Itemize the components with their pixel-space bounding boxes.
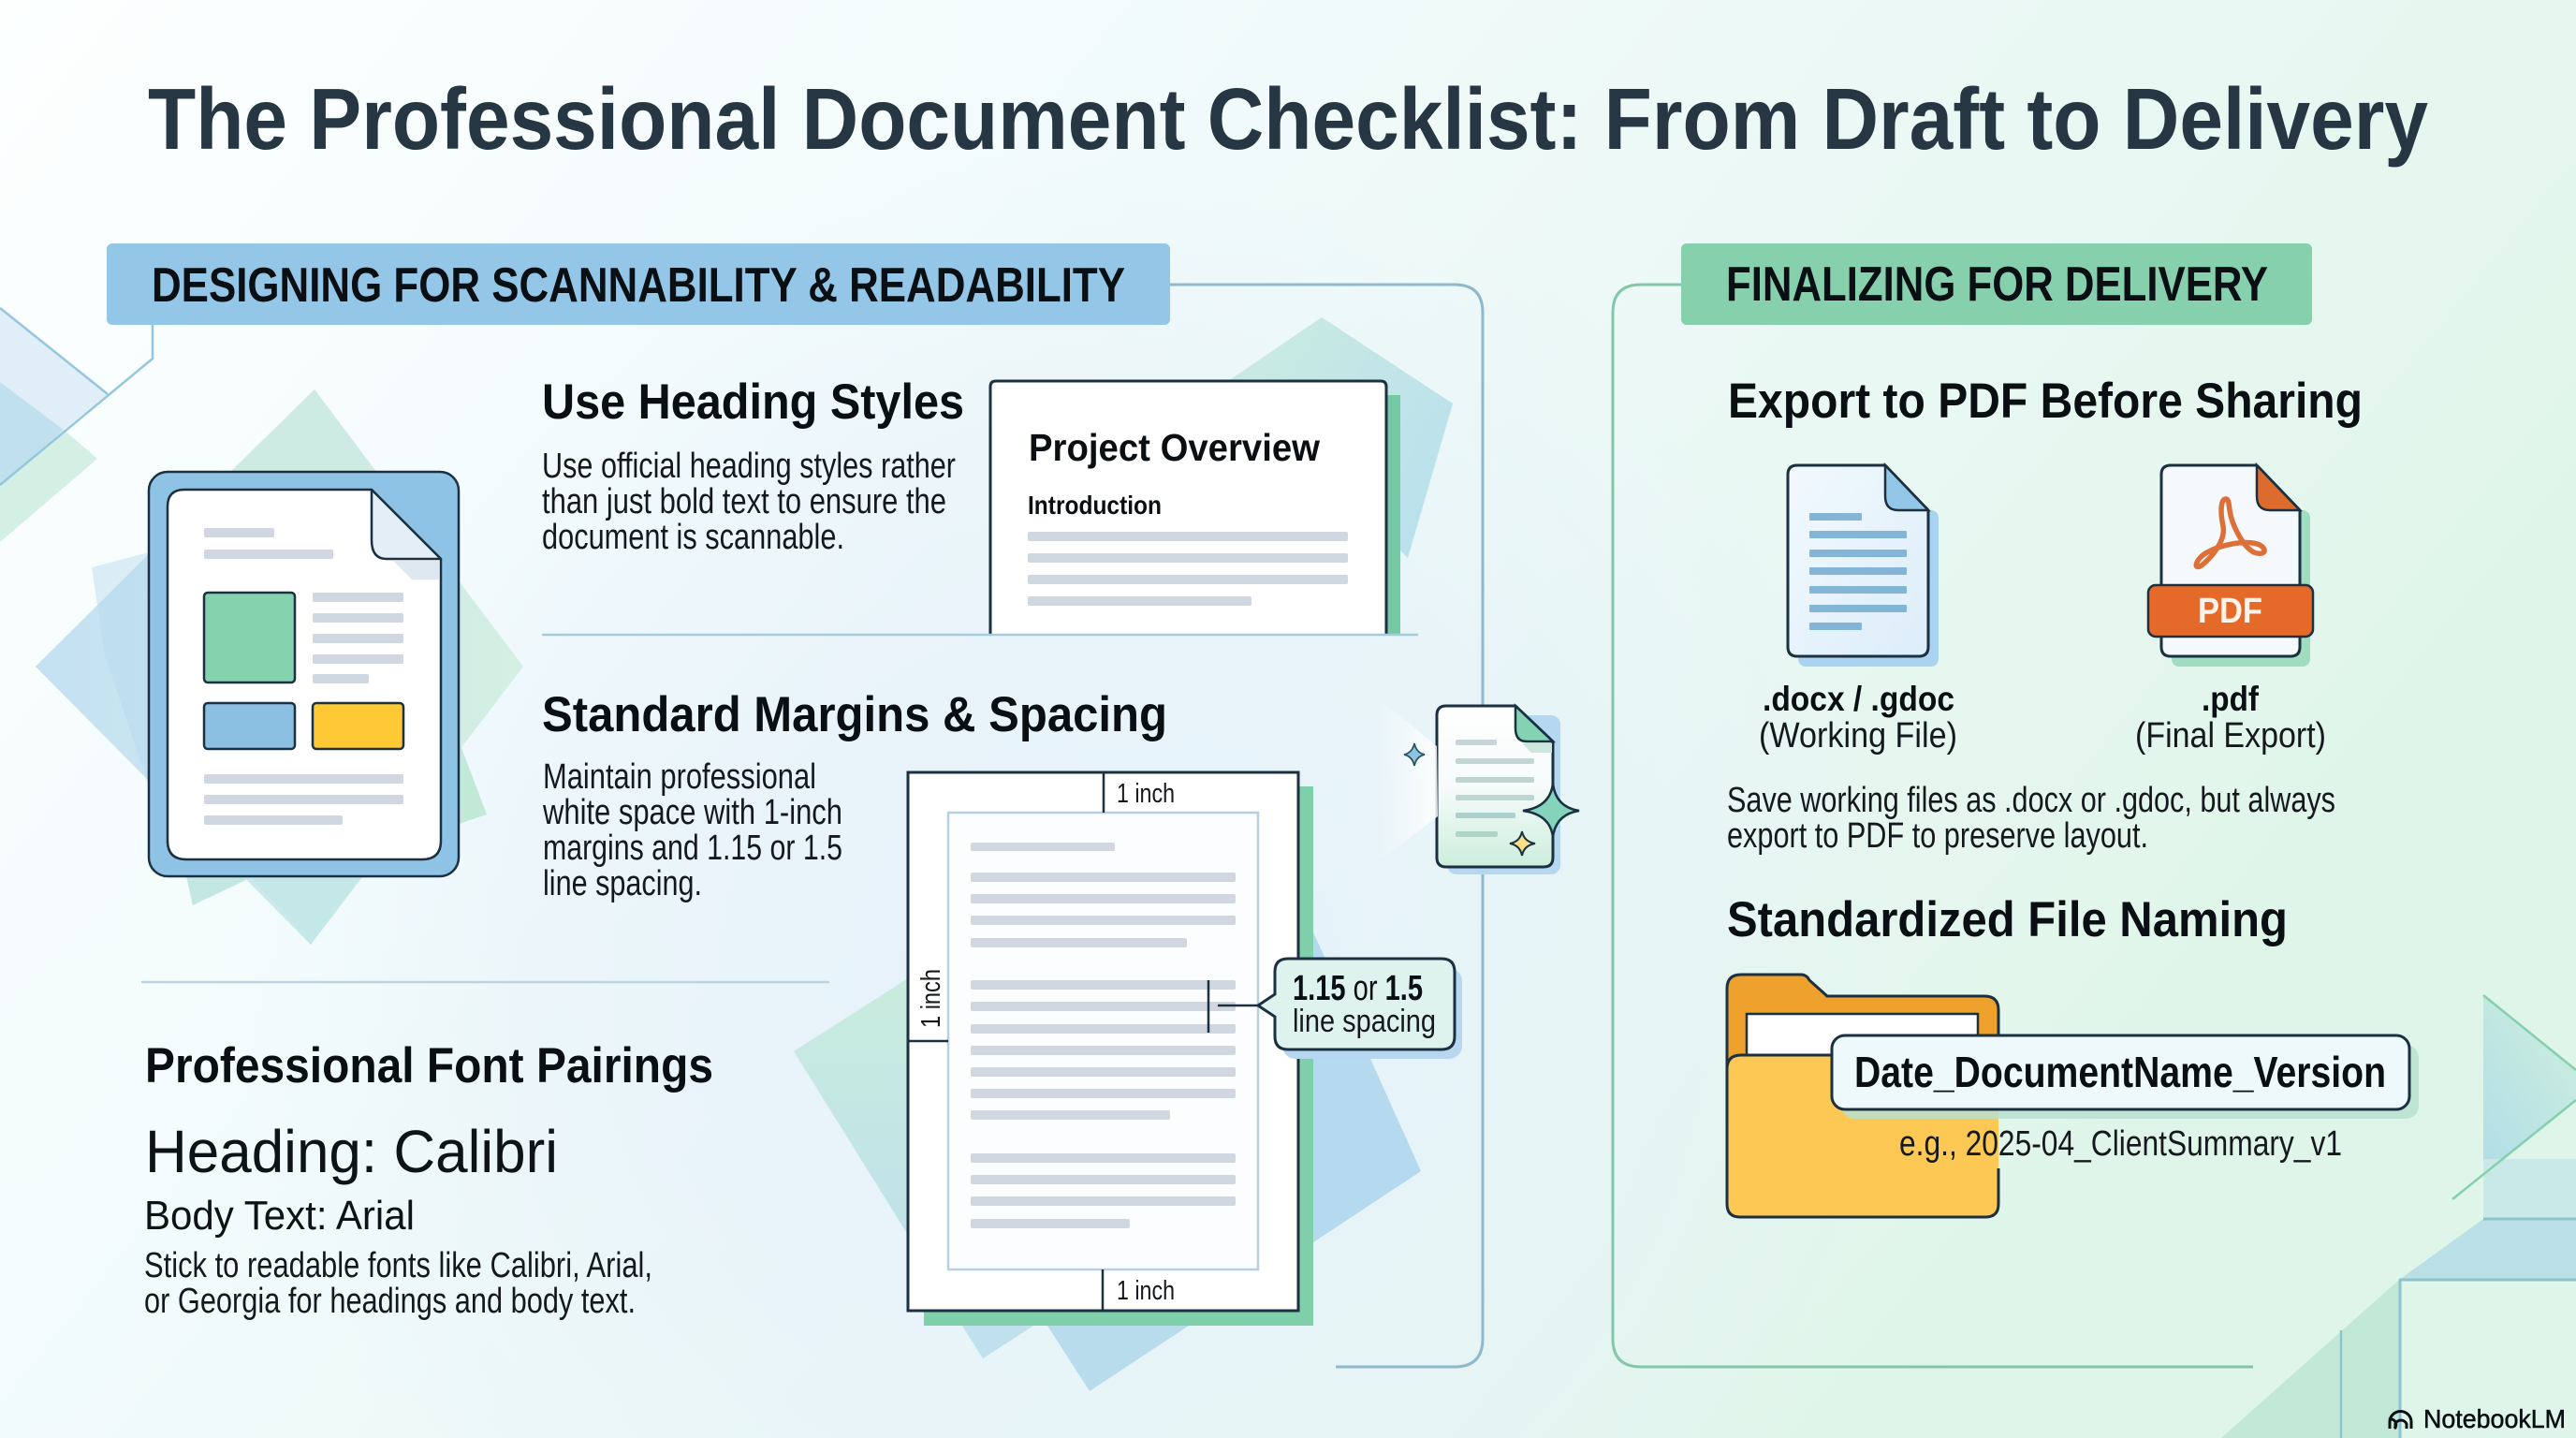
sample: heading font: Heading: Calibri	[145, 1118, 558, 1185]
label: final export	[2135, 680, 2326, 756]
text: export description	[1727, 781, 2335, 856]
illustration: project overview page: Project Overview	[1029, 426, 1320, 469]
text: export description: export to PDF to preserve layout.	[1727, 816, 2148, 856]
header banner left	[107, 243, 1170, 325]
text: margins description	[542, 757, 842, 903]
header banner left: DESIGNING FOR SCANNABILITY & READABILITY	[152, 258, 1125, 313]
icon: folder	[1727, 975, 1998, 1217]
heading: standard margins: Standard Margins & Spacing	[542, 687, 1167, 742]
text: fonts description: or Georgia for headings and body text.	[144, 1282, 636, 1321]
text: heading styles description: document is scannable.	[542, 518, 844, 557]
text: margins description: white space with 1-inch	[542, 793, 842, 832]
illustration: page margins diagram: 1 inch	[916, 969, 946, 1028]
panel outline right	[1613, 285, 2253, 1367]
heading: file naming: Standardized File Naming	[1727, 892, 2288, 947]
watermark: NotebookLM: NotebookLM	[2423, 1404, 2566, 1433]
label: final export: .pdf	[2202, 680, 2260, 718]
text: heading styles description: Use official heading styles rather	[542, 447, 956, 486]
text: export description: Save working files as .docx or .gdoc, but always	[1727, 781, 2335, 820]
icon: working file document	[1788, 465, 1939, 667]
illustration: project overview page	[990, 317, 1453, 635]
icon: sparkling document	[1376, 702, 1579, 874]
text: margins description: Maintain professional	[543, 757, 816, 797]
callout: line spacing: 1.15 or 1.5	[1293, 969, 1423, 1008]
label: working file	[1759, 680, 1957, 756]
decorative shapes: top left corner	[0, 308, 153, 542]
section: use heading styles	[542, 317, 1453, 635]
label: file name pattern	[1832, 1035, 2419, 1119]
text: heading styles description: than just bold text to ensure the	[542, 482, 946, 521]
text: heading styles description	[542, 447, 956, 557]
text: file naming example: e.g., 2025-04_ClientSummary_v1	[1899, 1124, 2342, 1164]
sample: body font: Body Text: Arial	[144, 1193, 415, 1239]
heading: export to pdf: Export to PDF Before Sharing	[1728, 374, 2363, 429]
panel outline left	[1170, 285, 1483, 1367]
label: working file: (Working File)	[1759, 716, 1957, 756]
heading: font pairings: Professional Font Pairings	[145, 1038, 713, 1093]
label: final export: (Final Export)	[2135, 716, 2326, 756]
text: margins description: margins and 1.15 or 1.5	[543, 829, 842, 868]
text: fonts description: Stick to readable fonts like Calibri, Arial,	[144, 1246, 652, 1285]
header banner right: FINALIZING FOR DELIVERY	[1726, 257, 2268, 312]
illustration: page margins diagram: 1 inch	[1117, 779, 1175, 809]
icon: pdf file document: PDF	[2198, 592, 2262, 631]
section: standard margins and spacing	[542, 687, 1462, 1391]
decorative shapes: bottom right corner	[2221, 995, 2576, 1438]
panel: finalizing for delivery	[1613, 243, 2419, 1367]
text: fonts description	[144, 1246, 652, 1321]
heading: use heading styles: Use Heading Styles	[542, 374, 964, 430]
label: working file: .docx / .gdoc	[1763, 680, 1954, 718]
illustration: page margins diagram: 1 inch	[1117, 1276, 1175, 1306]
icon: pdf file document	[2148, 465, 2313, 667]
section: professional font pairings	[141, 982, 829, 1321]
label: file name pattern: Date_DocumentName_Version	[1854, 1048, 2386, 1096]
callout: line spacing: line spacing	[1293, 1004, 1436, 1039]
icon: document layout illustration	[36, 389, 523, 945]
illustration: page margins diagram	[794, 772, 1421, 1391]
callout: line spacing	[1258, 959, 1462, 1059]
header banner right	[1681, 243, 2312, 325]
illustration: project overview page: Introduction	[1028, 491, 1162, 520]
text: margins description: line spacing.	[543, 864, 702, 903]
